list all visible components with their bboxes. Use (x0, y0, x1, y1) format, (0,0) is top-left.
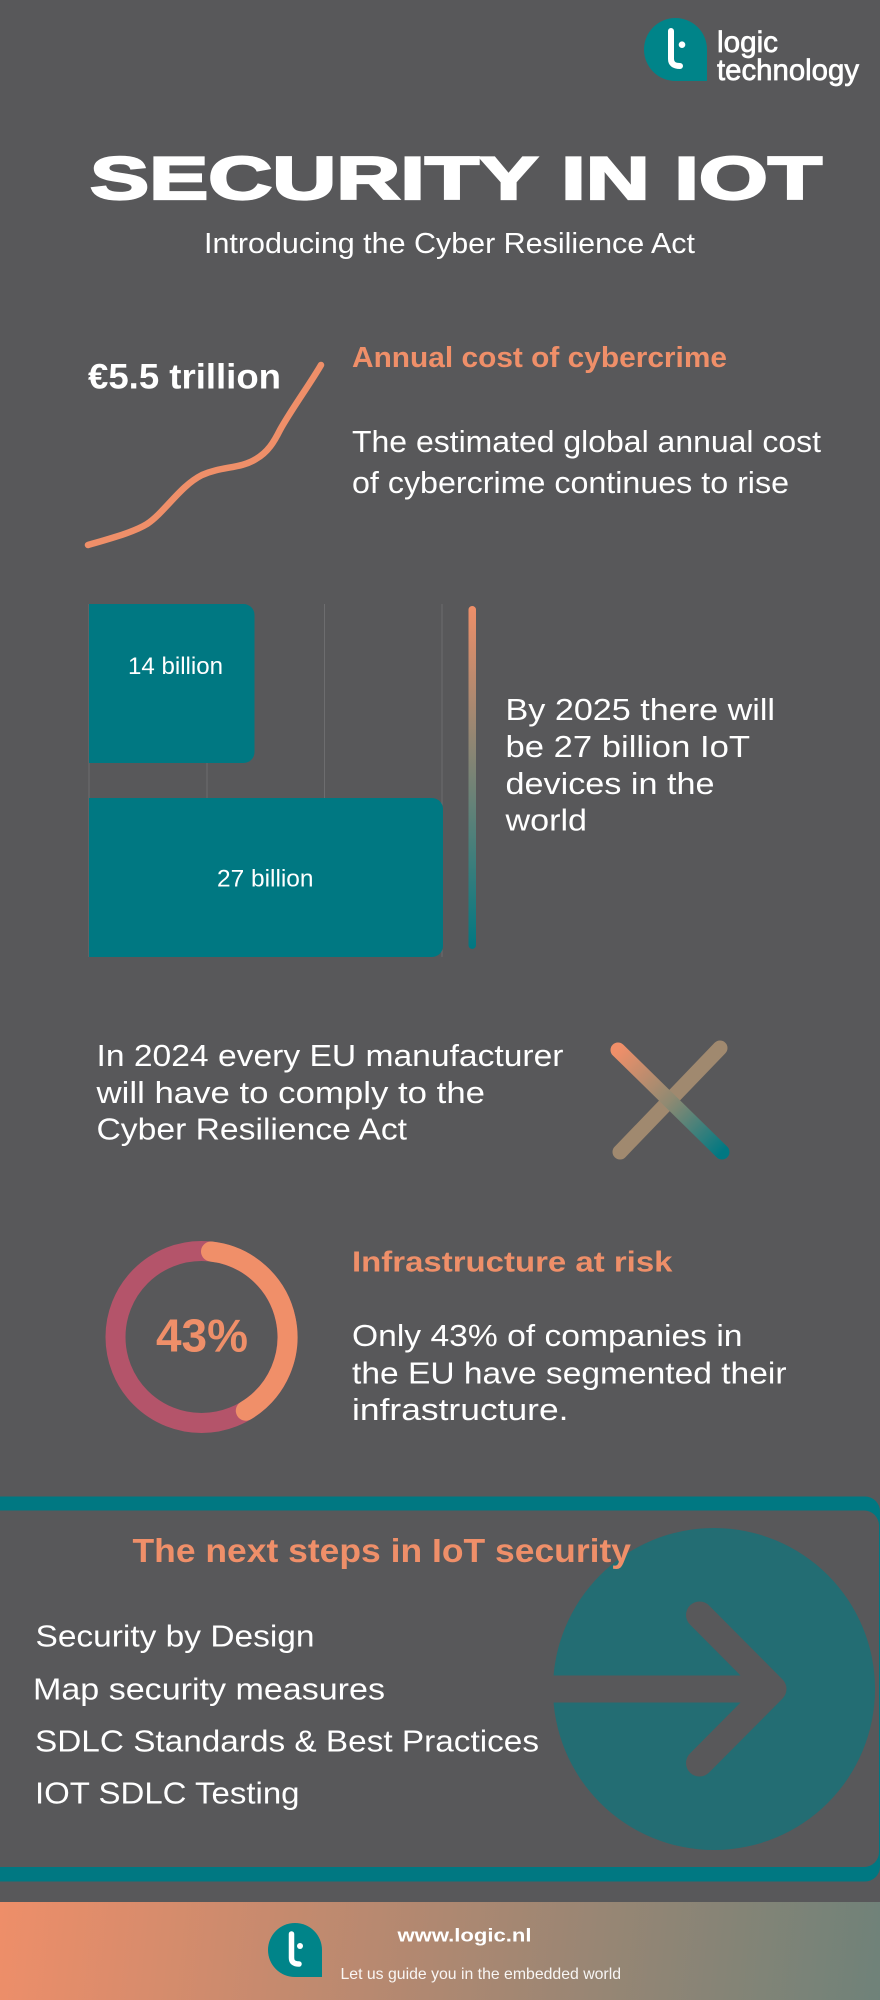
title: SECURITY IN IOT (90, 145, 822, 212)
teal frame (0, 1496, 880, 1882)
list: next steps (33, 1618, 539, 1810)
list: next steps: Map security measures (33, 1672, 385, 1706)
subtitle: Introducing the Cyber Resilience Act (204, 228, 695, 260)
icon: gradient cross (618, 1048, 722, 1152)
heading: next steps: The next steps in IoT security (132, 1532, 632, 1569)
panel: infrastructure at risk (116, 1246, 786, 1427)
text block: cost description (352, 424, 821, 500)
list: next steps: Security by Design (36, 1618, 314, 1654)
footer tagline: Let us guide you in the embedded world (340, 1966, 621, 1983)
panel: Cyber Resilience Act (95, 1038, 722, 1152)
text block: cost description: The estimated global annual cost (352, 424, 821, 459)
inner panel (0, 1510, 879, 1867)
bar: 27 billion: 27 billion (217, 866, 314, 892)
text block: compliance: will have to comply to the (95, 1075, 485, 1110)
text block: cost description: of cybercrime continues to rise (352, 465, 789, 500)
heading: annual cost: Annual cost of cybercrime (352, 342, 727, 374)
footer link: www.logic.nl (396, 1926, 532, 1946)
text block: segmentation: Only 43% of companies in (352, 1318, 742, 1353)
text block: compliance: Cyber Resilience Act (96, 1112, 407, 1146)
text block: segmentation: infrastructure. (352, 1392, 568, 1427)
logo: logic technology: logic (717, 26, 778, 59)
text block: segmentation (352, 1318, 786, 1427)
logo: logic technology: technology (717, 54, 859, 87)
panel: IoT devices bar chart (89, 604, 775, 957)
icon: footer logo (268, 1923, 322, 1977)
bar: 14 billion: 14 billion (128, 653, 223, 680)
donut chart: 43% (116, 1251, 288, 1423)
text block: 27 billion devices (504, 692, 775, 838)
text block: segmentation: the EU have segmented their (352, 1356, 786, 1390)
bar chart (89, 604, 443, 957)
donut chart: 43%: 43% (156, 1310, 248, 1362)
bar: 27 billion (89, 798, 443, 957)
text block: 27 billion devices: be 27 billion IoT (506, 729, 750, 764)
list: next steps: IOT SDLC Testing (35, 1776, 300, 1810)
figure: 5.5 trillion: €5.5 trillion (88, 358, 281, 396)
panel: next steps in IoT security (0, 1496, 880, 1882)
panel: annual cost of cybercrime (88, 342, 821, 545)
logo: logic technology (644, 18, 859, 87)
text block: 27 billion devices: world (504, 802, 587, 838)
text block: compliance: In 2024 every EU manufacturer (96, 1038, 564, 1073)
line chart: rising cost curve (88, 365, 321, 545)
gradient divider bar (468, 606, 476, 949)
text block: 27 billion devices: devices in the (506, 766, 714, 801)
icon: arrow in circle (553, 1528, 875, 1850)
footer (0, 1902, 880, 2000)
heading: infrastructure at risk: Infrastructure at risk (352, 1246, 673, 1278)
bar: 14 billion (89, 604, 255, 763)
text block: compliance (95, 1038, 564, 1146)
list: next steps: SDLC Standards & Best Practices (35, 1724, 539, 1758)
text block: 27 billion devices: By 2025 there will (506, 692, 775, 727)
